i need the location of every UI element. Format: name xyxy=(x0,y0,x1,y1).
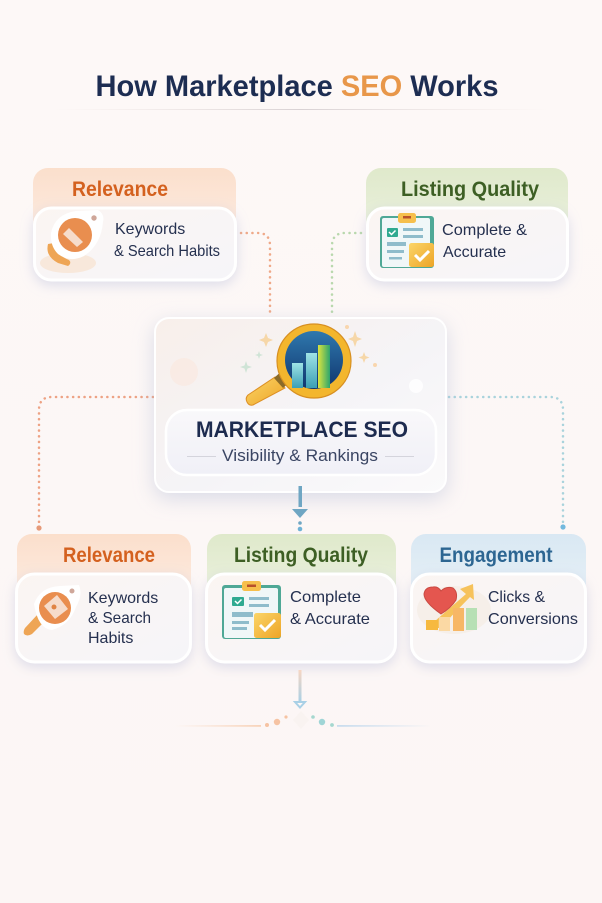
text: complete: Complete xyxy=(290,589,361,606)
icon: checklist xyxy=(222,581,281,639)
heading: engagement: Engagement xyxy=(440,544,552,567)
text: marketplace seo: MARKETPLACE SEO xyxy=(196,417,408,442)
connector: right dotted xyxy=(449,397,563,526)
arrow: center down xyxy=(292,486,308,531)
node dots xyxy=(36,524,566,531)
icon: keyword magnifier xyxy=(40,210,103,273)
footer dots and lines xyxy=(175,711,432,729)
arrow: faint bottom xyxy=(295,670,305,708)
pill: title xyxy=(166,410,436,475)
text: conversions: Conversions xyxy=(488,611,578,628)
panel: top listing quality xyxy=(366,168,568,280)
text: complete: Complete & xyxy=(442,222,527,239)
panel: bottom relevance xyxy=(16,534,191,662)
text: visibility and rankings: Visibility & Rankings xyxy=(222,446,378,465)
icon: magnifier with bar chart xyxy=(246,324,351,405)
text: habits: Habits xyxy=(88,630,133,647)
connector: left dotted xyxy=(39,397,153,526)
icon: checklist xyxy=(380,213,434,268)
text: clicks: Clicks & xyxy=(488,589,545,606)
panel: central marketplace seo xyxy=(155,318,446,492)
text: accurate: & Accurate xyxy=(290,611,370,628)
connector: top right dotted xyxy=(332,233,361,314)
icon: heart and growth chart xyxy=(417,584,491,634)
icon: keyword magnifier xyxy=(24,585,80,636)
text: accurate: Accurate xyxy=(443,244,506,261)
heading: listing quality: Listing Quality xyxy=(401,178,539,201)
heading: listing quality: Listing Quality xyxy=(234,544,368,567)
panel: top relevance xyxy=(33,168,236,280)
panel: bottom engagement xyxy=(411,534,586,662)
decoration: sparkles xyxy=(170,325,423,393)
title: How Marketplace SEO Works xyxy=(96,70,499,103)
text: search: & Search xyxy=(88,610,151,627)
heading: relevance: Relevance xyxy=(72,178,168,201)
connector: top left dotted xyxy=(241,233,270,314)
heading: relevance: Relevance xyxy=(63,544,155,567)
text: keywords: Keywords xyxy=(88,590,158,607)
text: search habits: & Search Habits xyxy=(114,243,220,260)
panel: bottom listing quality xyxy=(206,534,396,662)
text: keywords: Keywords xyxy=(115,221,185,238)
